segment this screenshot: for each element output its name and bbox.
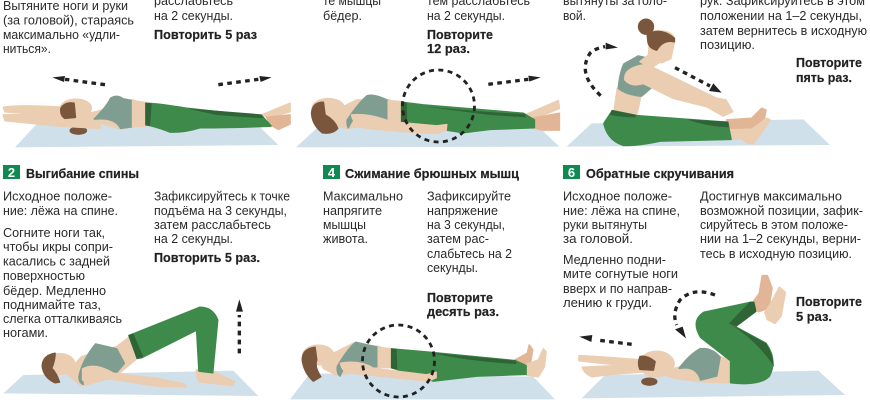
text: exercise 2 instruction right [154, 188, 290, 265]
text: exercise 4 instruction left: напрягите [323, 203, 382, 218]
icon: dashed circle on abdomen [362, 325, 434, 397]
heading: exercise 6: Обратные скручивания [586, 166, 734, 181]
text: exercise 2 instruction left [3, 188, 122, 340]
illustration: exercise 6 reverse crunch [579, 276, 845, 398]
text: exercise 6 instruction left: лению к груди. [563, 295, 652, 310]
text: exercise 6 instruction left: Медленно подни- [563, 252, 666, 267]
arrow: curved forward [585, 43, 618, 96]
text: exercise 3 instruction right [427, 0, 530, 56]
text: exercise 1 instruction left: ниться». [3, 41, 51, 56]
text: exercise 5 instruction right: положении на 1–2 секунды, [700, 8, 862, 23]
text: exercise 4 instruction left [323, 188, 403, 246]
icon: dashed circle on thighs [402, 70, 474, 142]
text: exercise 4 instruction right [427, 188, 512, 319]
text: exercise 6 instruction left: за головой. [563, 231, 633, 246]
text: exercise 6 instruction left: вверх и по направ- [563, 281, 672, 296]
text: exercise 2 instruction left: ногами. [3, 325, 48, 340]
text: exercise 3 instruction right: 12 раз. [427, 41, 470, 56]
text: exercise 5 instruction right: Повторите [796, 55, 862, 70]
arrow: left reach [579, 335, 632, 344]
text: exercise 2 instruction right: подъёма на 3 секунды, [154, 203, 287, 218]
text: exercise 1 instruction left: максимально «удли- [3, 27, 120, 42]
text: exercise 3 instruction right: на 2 секунды. [427, 8, 505, 23]
text: exercise 6 instruction right: тесь в исходную позицию. [700, 246, 852, 261]
text: exercise 2 instruction left: поверхностью [3, 268, 85, 283]
text: exercise 4 instruction right: секунды. [427, 260, 478, 275]
text: exercise 2 instruction left: ние: лёжа на спине. [3, 203, 118, 218]
heading: exercise 2: 2 [8, 165, 15, 180]
text: exercise 6 instruction right: нии на 1–2 секунды, верни- [700, 231, 861, 246]
text: exercise 5 instruction left [563, 0, 667, 23]
text: exercise 1 instruction right [154, 0, 258, 42]
text: exercise 6 instruction right: Достигнув максимально [700, 188, 842, 204]
text: exercise 1 instruction right: Повторить 5 раз [154, 27, 258, 42]
arrow: diagonal reach [675, 68, 722, 93]
text: exercise 3 instruction left: бёдер. [323, 8, 362, 23]
illustration: exercise 2 back bridge [3, 307, 258, 396]
text: exercise 4 instruction right: напряжение [427, 203, 498, 218]
text: exercise 4 instruction right: десять раз. [427, 304, 499, 319]
text: exercise 2 instruction left: чтобы икры сопри- [3, 239, 113, 254]
text: exercise 3 instruction left [323, 0, 381, 23]
text: exercise 6 instruction right: возможной позиции, зафик- [700, 203, 863, 218]
text: exercise 2 instruction left: касались с задней [3, 254, 110, 268]
text: exercise 6 instruction right: сируйтесь в этом положе- [700, 217, 848, 232]
text: exercise 2 instruction left: Согните ноги так, [3, 225, 105, 240]
text: exercise 6 instruction right: Повторите [796, 294, 862, 309]
text: exercise 4 instruction left: мышцы [323, 217, 366, 232]
text: exercise 5 instruction right: пять раз. [796, 70, 852, 85]
text: exercise 4 instruction right: Повторите [427, 290, 493, 305]
heading: exercise 6: 6 [568, 165, 575, 180]
text: exercise 6 instruction left: мите согнутые ноги [563, 266, 678, 281]
text: exercise 3 instruction right: Повторите [427, 27, 493, 42]
text: exercise 4 instruction right: на 3 секунды, [427, 217, 505, 232]
text: exercise 6 instruction left: руки вытянуты [563, 217, 647, 232]
text: exercise 1 instruction left [3, 0, 134, 56]
arrow: right stretch [218, 76, 272, 85]
illustration: exercise 1 stretching lying down [3, 96, 290, 147]
text: exercise 6 instruction right [700, 188, 863, 324]
text: exercise 5 instruction right [700, 0, 867, 85]
text: exercise 2 instruction right: Зафиксируйтесь к точке [154, 188, 290, 204]
text: exercise 5 instruction left: вой. [563, 8, 586, 23]
text: exercise 4 instruction left: Максимально [323, 188, 403, 204]
arrow: up [236, 299, 243, 353]
text: exercise 2 instruction right: на 2 секунды. [154, 231, 233, 246]
text: exercise 5 instruction right: позицию. [700, 37, 755, 52]
text: exercise 5 instruction right: затем вернитесь в исходную [700, 23, 867, 38]
text: exercise 2 instruction right: Повторить 5 раз. [154, 250, 260, 265]
text: exercise 2 instruction left: поднимайте таз, [3, 297, 101, 312]
text: exercise 4 instruction right: затем рас- [427, 231, 489, 246]
illustration: exercise 5 seated forward bend [567, 19, 830, 147]
text: exercise 4 instruction right: Зафиксируйте [427, 188, 511, 204]
text: exercise 2 instruction right: затем расслабьтесь [154, 217, 271, 232]
text: exercise 2 instruction left: Исходное положе- [3, 188, 112, 204]
text: exercise 6 instruction left [563, 188, 680, 310]
text: exercise 4 instruction right: слабьтесь на 2 [427, 246, 512, 261]
heading: exercise 4: 4 [328, 165, 336, 180]
heading: exercise 4: Сжимание брюшных мышц [345, 166, 519, 181]
text: exercise 6 instruction right: 5 раз. [796, 309, 832, 324]
illustration: exercise 3 leg tension lying down [296, 95, 559, 147]
illustration: exercise 4 abdominal squeeze [290, 342, 555, 399]
text: exercise 1 instruction left: (за головой), стараясь [3, 12, 134, 28]
text: exercise 6 instruction left: Исходное положе- [563, 188, 672, 204]
text: exercise 2 instruction left: бёдер. Медленно [3, 283, 106, 298]
arrow: left stretch [52, 76, 105, 85]
arrow: right tension [488, 76, 541, 84]
arrow: curved legs up [675, 292, 715, 338]
text: exercise 4 instruction left: живота. [323, 231, 368, 246]
text: exercise 1 instruction right: на 2 секунды. [154, 8, 233, 23]
heading: exercise 2: Выгибание спины [26, 166, 139, 181]
text: exercise 2 instruction left: слегка отталкиваясь [3, 311, 122, 326]
text: exercise 6 instruction left: ние: лёжа на спине, [563, 203, 680, 218]
